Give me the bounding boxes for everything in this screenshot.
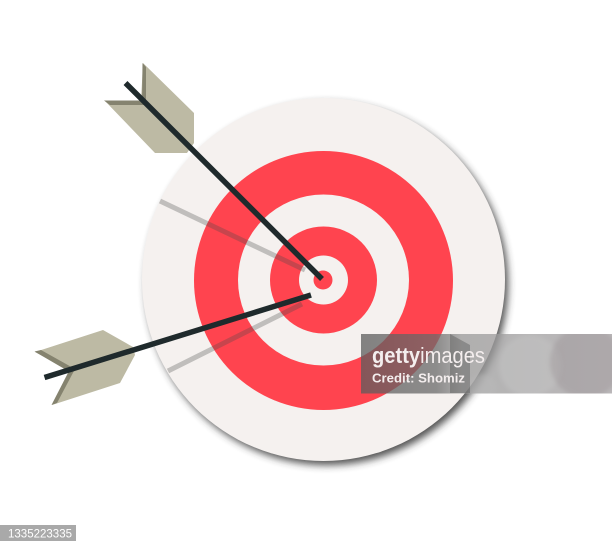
credit line: Credit: Shomiz (372, 370, 465, 386)
lower arrow fletching (35, 330, 135, 405)
upper arrow shaft (126, 83, 322, 279)
lower arrow shadow (168, 304, 302, 371)
inner white ring (299, 256, 348, 304)
target board (142, 98, 508, 465)
red ring (194, 151, 453, 410)
fletching fold shading (34, 350, 75, 371)
board shadow (146, 103, 508, 465)
fletching fold shading (142, 63, 146, 104)
lower arrow shaft (44, 295, 311, 378)
bullseye (314, 270, 332, 290)
tag number: 1335223335 (8, 528, 72, 540)
tag background (0, 525, 76, 541)
arrow shadows on board (160, 201, 305, 371)
upper arrow fletching (105, 63, 194, 153)
getty images logo: gettyimages (372, 343, 485, 368)
white ring (238, 194, 409, 366)
watermark banner (361, 334, 612, 394)
lower arrow (34, 295, 311, 405)
banner pattern circles (450, 334, 612, 394)
outer ring (142, 98, 505, 461)
image id tag (0, 525, 76, 541)
banner background (361, 334, 612, 394)
upper arrow shadow (160, 201, 305, 270)
inner red ring (270, 226, 377, 334)
upper arrow (104, 63, 322, 279)
